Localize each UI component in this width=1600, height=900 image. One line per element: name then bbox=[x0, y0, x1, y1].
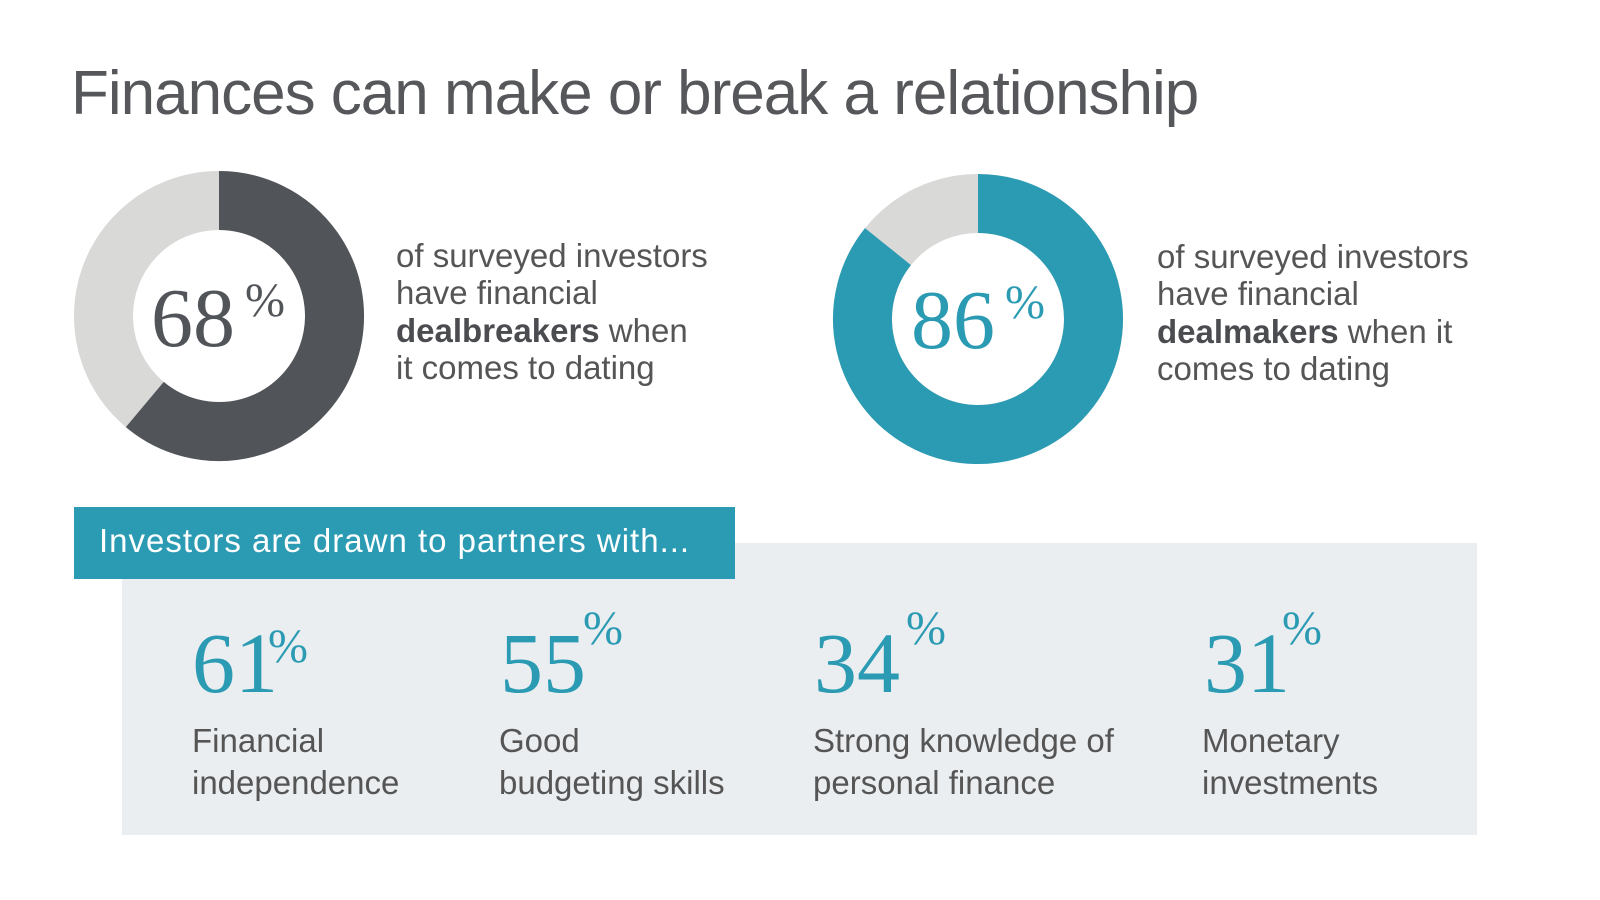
donut chart: 86% dealmakers bbox=[862, 204, 1094, 434]
panel: partner traits bbox=[122, 543, 1477, 835]
stat: 31% monetary investments: investments bbox=[1202, 764, 1378, 801]
stat: 34% strong knowledge: % bbox=[906, 602, 946, 655]
stat: 61% financial independence: independence bbox=[192, 764, 399, 801]
text block: dealbreakers: of surveyed investors bbox=[396, 237, 708, 274]
stat: 55% good budgeting bbox=[499, 602, 725, 801]
stat: 55% good budgeting: Good bbox=[499, 722, 580, 759]
donut chart: 86% dealmakers: % bbox=[1005, 276, 1045, 329]
donut chart: 68% dealbreakers: 68 bbox=[151, 272, 235, 365]
banner heading: Investors are drawn to partners with... bbox=[99, 522, 690, 559]
stat: 61% financial independence: % bbox=[268, 620, 308, 673]
donut chart: 86% dealmakers: 86 bbox=[911, 274, 995, 367]
stat: 31% monetary investments: Monetary bbox=[1202, 722, 1340, 759]
text block: dealmakers: comes to dating bbox=[1157, 350, 1390, 387]
stat: 31% monetary investments bbox=[1202, 602, 1378, 801]
stat: 55% good budgeting: budgeting skills bbox=[499, 764, 725, 801]
text block: dealbreakers: dealbreakers when bbox=[396, 312, 688, 349]
text block: dealbreakers: have financial bbox=[396, 274, 598, 311]
text block: dealmakers: dealmakers when it bbox=[1157, 313, 1452, 350]
text block: dealbreakers bbox=[396, 237, 708, 386]
stat: 55% good budgeting: 55 bbox=[500, 615, 586, 711]
donut chart: 68% dealbreakers: % bbox=[245, 274, 285, 327]
stat: 34% strong knowledge: Strong knowledge of bbox=[813, 722, 1115, 759]
stat: 55% good budgeting: % bbox=[583, 602, 623, 655]
text block: dealmakers bbox=[1157, 238, 1469, 387]
text block: dealbreakers: it comes to dating bbox=[396, 349, 655, 386]
stat: 61% financial independence bbox=[192, 615, 399, 801]
stat: 31% monetary investments: % bbox=[1282, 602, 1322, 655]
stat: 34% strong knowledge: personal finance bbox=[813, 764, 1055, 801]
donut chart: 68% dealbreakers bbox=[104, 200, 335, 432]
stat: 34% strong knowledge: 34 bbox=[814, 615, 900, 711]
stat: 61% financial independence: Financial bbox=[192, 722, 324, 759]
text block: dealmakers: have financial bbox=[1157, 275, 1359, 312]
stat: 34% strong knowledge bbox=[813, 602, 1115, 801]
text block: dealmakers: of surveyed investors bbox=[1157, 238, 1469, 275]
title: Finances can make or break a relationship bbox=[71, 59, 1198, 128]
stat: 31% monetary investments: 31 bbox=[1204, 615, 1290, 711]
stat: 61% financial independence: 61 bbox=[192, 615, 278, 711]
banner heading bbox=[74, 507, 735, 579]
